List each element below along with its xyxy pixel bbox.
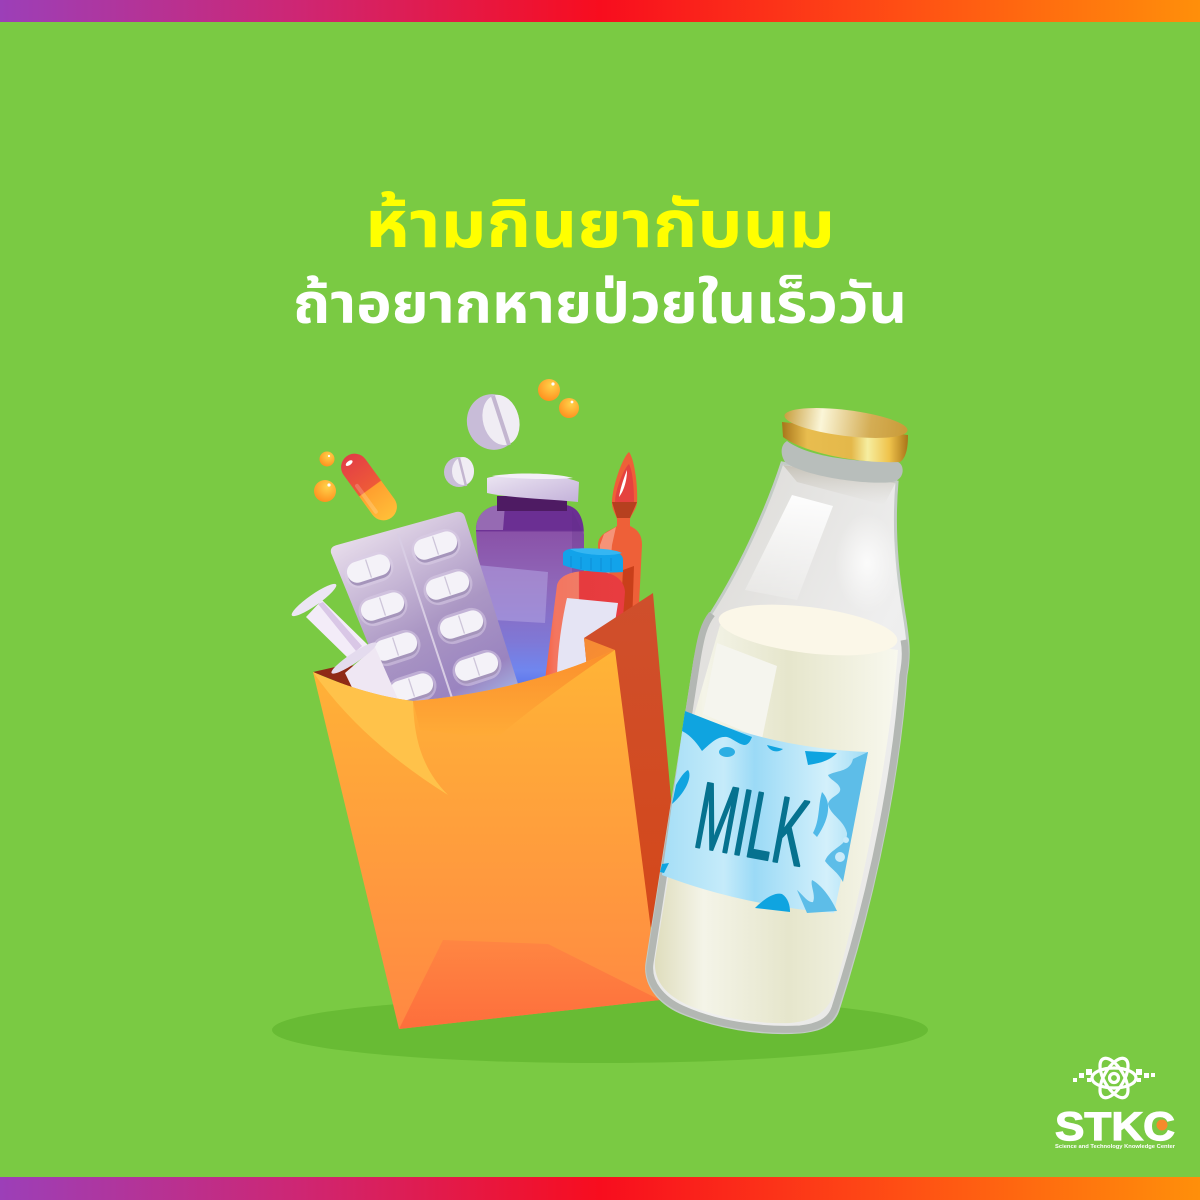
cap side xyxy=(782,422,908,462)
bottom rainbow bar xyxy=(0,1177,1200,1200)
top rainbow bar xyxy=(0,0,1200,22)
glass highlight xyxy=(745,495,833,600)
icon: small tablet xyxy=(444,457,474,487)
bottle neck ring xyxy=(782,441,903,483)
title: main heading: ห้ามกินยากับนม xyxy=(365,187,835,261)
milk highlight xyxy=(703,643,777,739)
bag back panel xyxy=(584,593,672,930)
icon: orange balls xyxy=(314,379,579,502)
bag top shade xyxy=(413,650,615,736)
logo orange dot xyxy=(1156,1120,1168,1130)
icon: orange ampoule xyxy=(598,452,642,625)
icon: large tablet xyxy=(461,388,525,456)
milk body xyxy=(655,625,898,1023)
bag front xyxy=(313,650,660,1029)
syringe barrel xyxy=(329,639,400,704)
illustration: milk bottle xyxy=(647,403,909,1033)
icon: red bottle with blue cap xyxy=(545,548,625,680)
cap top xyxy=(783,403,909,443)
label text: MILK xyxy=(688,762,816,886)
logo: STKC xyxy=(1055,1054,1176,1150)
bag bottom fold xyxy=(399,940,660,1029)
shoulder shading xyxy=(783,465,896,505)
bag inner flap xyxy=(584,638,615,668)
illustration: bag of medicine xyxy=(289,452,672,1029)
milk surface xyxy=(716,596,900,664)
label xyxy=(660,711,868,913)
glass glow xyxy=(835,513,899,613)
icon: syringe plunger xyxy=(289,580,368,660)
logo atom icon xyxy=(1092,1054,1136,1102)
bag left fold xyxy=(313,672,448,795)
logo wordmark: STKC xyxy=(1055,1105,1175,1149)
icon: capsule xyxy=(336,448,402,526)
logo dots xyxy=(1073,1069,1155,1082)
pills xyxy=(341,525,505,711)
label splashes xyxy=(660,711,868,913)
icon: blister pack xyxy=(331,512,525,712)
ground shadow xyxy=(272,997,928,1063)
bottle outline xyxy=(647,463,908,1033)
icon: purple bottle xyxy=(476,474,584,700)
lower rim shading xyxy=(650,614,905,1029)
bag interior xyxy=(313,630,615,712)
title: sub heading: ถ้าอยากหายป่วยในเร็ววัน xyxy=(293,272,907,335)
logo caption: Science and Technology Knowledge Center xyxy=(1055,1144,1176,1150)
